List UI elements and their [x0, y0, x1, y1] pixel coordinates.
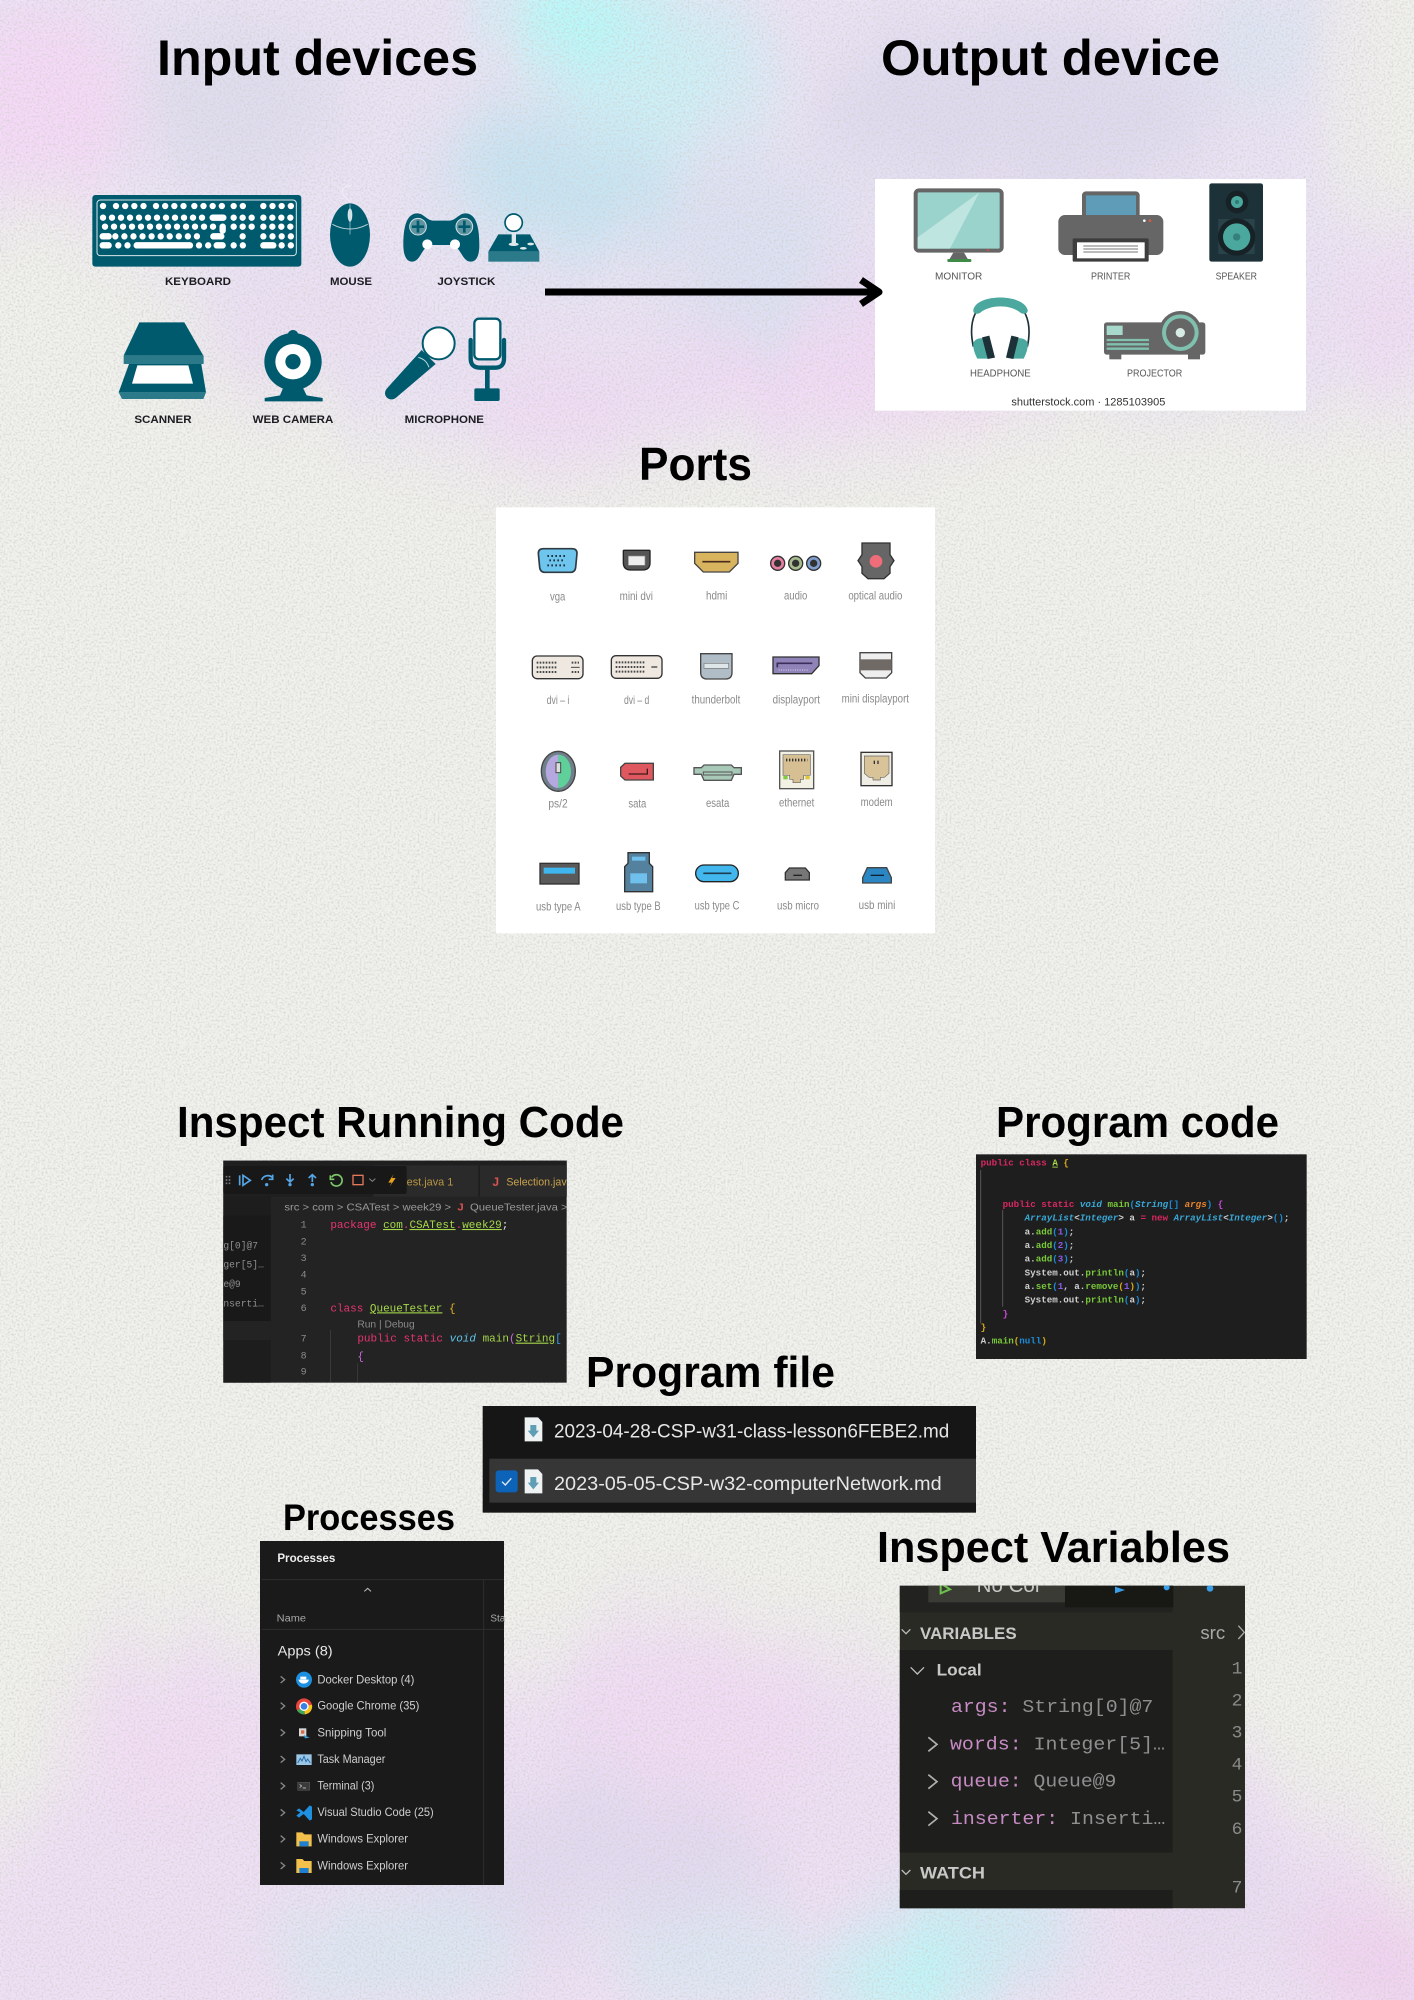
heading text: Processes [277, 1552, 335, 1565]
local scope: Local [937, 1660, 982, 1679]
row chevrons [281, 1676, 285, 1869]
code lines: class QueueTester { [330, 1303, 456, 1315]
line numbers: 1 [1232, 1659, 1242, 1679]
variable fragments: g[0]@7 [223, 1241, 258, 1252]
tab labels [407, 1175, 567, 1189]
label: mouse: MOUSE [330, 276, 372, 288]
breadcrumb: src > com > CSATest > week29 > J QueueTester.java > [284, 1202, 568, 1213]
code listing: a.add(2); [1025, 1240, 1074, 1251]
panel: input device icons [92, 184, 539, 426]
icon: usb type A [540, 863, 579, 884]
panel: output devices [875, 179, 1306, 411]
icon: modem [861, 752, 892, 786]
label: usb type A: usb type A [536, 900, 581, 913]
icon: printer [1058, 191, 1163, 262]
icon: mouse [330, 184, 370, 267]
code listing: a.add(1); [1025, 1226, 1074, 1237]
variables header: VARIABLES [920, 1624, 1017, 1643]
icon: sata [621, 763, 653, 780]
label: usb mini: usb mini [859, 899, 895, 912]
line numbers: 2 [1232, 1691, 1242, 1711]
row: Docker Desktop: Docker Desktop (4) [317, 1673, 414, 1686]
title: Inspect Running Code: Inspect Running Code [177, 1098, 624, 1147]
watch header [901, 1867, 984, 1878]
label: dvi-d: dvi – d [624, 694, 649, 707]
icon: usb micro [785, 868, 809, 880]
row: Task Manager: Task Manager [317, 1753, 385, 1766]
panel: running code screenshot [223, 1161, 568, 1383]
label: web camera: WEB CAMERA [253, 414, 333, 426]
line numbers: 2 [301, 1236, 307, 1247]
label: hdmi: hdmi [706, 589, 727, 602]
code listing: } [981, 1322, 986, 1333]
label: scanner: SCANNER [134, 414, 192, 426]
line numbers: 3 [301, 1253, 307, 1264]
row: Snipping Tool: Snipping Tool [317, 1726, 386, 1739]
label: audio: audio [784, 589, 807, 602]
panel: ports [496, 507, 935, 933]
line numbers: 5 [1232, 1787, 1242, 1807]
debug toolbar [223, 1166, 407, 1194]
label: sata: sata [628, 797, 647, 810]
row: Visual Studio Code: Visual Studio Code (25) [317, 1806, 434, 1819]
code lines [330, 1220, 562, 1363]
panel: processes screenshot: Sta [490, 1613, 506, 1624]
variable rows: args: String[0]@7 [951, 1696, 1153, 1718]
code listing: public static void main(String[] args) { [1003, 1199, 1223, 1210]
line numbers [1232, 1662, 1242, 1892]
label: printer: PRINTER [1091, 271, 1130, 282]
label: stock credit: shutterstock.com · 1285103905 [1011, 397, 1165, 409]
file row 2 [496, 1469, 942, 1495]
icon: speaker [1209, 183, 1263, 262]
title: Input devices: Input devices [157, 30, 478, 86]
code lines: Run | Debug [357, 1320, 415, 1331]
tab labels: est.java 1 [407, 1176, 453, 1188]
icon: headphone [972, 297, 1029, 359]
label: microphone: MICROPHONE [405, 414, 484, 426]
label: dvi-i: dvi – i [547, 694, 569, 707]
icon: usb mini [863, 868, 891, 883]
panel: variables screenshot [900, 1574, 1245, 1908]
tab labels: J [492, 1175, 499, 1189]
icon: mini displayport [860, 653, 892, 678]
label: keyboard: KEYBOARD [165, 276, 231, 288]
label: ps/2: ps/2 [548, 797, 568, 810]
icon: dvi-d [611, 656, 662, 678]
icon: mini dvi [623, 550, 650, 570]
icon: ethernet [780, 751, 814, 789]
label: monitor: MONITOR [935, 271, 982, 282]
code listing: a.set(1, a.remove(1)); [1025, 1281, 1146, 1292]
variable rows: inserter: Inserti… [951, 1808, 1165, 1830]
icon: keyboard [92, 195, 301, 267]
watch header: WATCH [920, 1863, 985, 1882]
icon: gamepad [403, 213, 479, 262]
row: Windows Explorer: Windows Explorer [317, 1833, 408, 1846]
icon: displayport [773, 657, 819, 674]
icon: ps/2 [541, 751, 575, 791]
code lines: package com.CSATest.week29; [330, 1220, 508, 1232]
title: Inspect Variables: Inspect Variables [877, 1523, 1230, 1572]
label: displayport: displayport [773, 693, 821, 706]
label: optical audio: optical audio [848, 589, 902, 602]
row: Terminal: Terminal (3) [317, 1780, 374, 1793]
variable fragments [223, 1241, 264, 1309]
icon: web camera [264, 330, 323, 401]
label: vga: vga [550, 591, 566, 604]
debug bar remnant: No Cor [977, 1574, 1042, 1597]
label: modem: modem [861, 796, 893, 809]
icon: handheld microphone [385, 327, 455, 399]
variable rows [928, 1696, 1165, 1830]
panel: processes screenshot: Name [277, 1613, 306, 1624]
line numbers: 7 [301, 1334, 307, 1345]
icon: thunderbolt [701, 654, 732, 679]
icon: monitor [916, 190, 1002, 262]
code lines: { [357, 1351, 364, 1363]
title: Program code: Program code [996, 1098, 1279, 1147]
row: Google Chrome: Google Chrome (35) [317, 1700, 419, 1713]
icon: projector [1104, 311, 1205, 359]
title: Output device: Output device [881, 30, 1220, 86]
icon: dvi-i [532, 656, 583, 679]
label: mini dvi: mini dvi [620, 590, 653, 603]
icon: vga [538, 549, 577, 572]
variable fragments: nserti… [223, 1298, 264, 1309]
icon: hdmi [695, 552, 738, 572]
variable rows: queue: Queue@9 [951, 1771, 1116, 1793]
debug bar remnant [940, 1586, 1214, 1595]
arrow: input to output [545, 280, 879, 304]
line numbers [301, 1220, 307, 1378]
line numbers: 6 [301, 1303, 307, 1314]
line numbers: 5 [301, 1286, 307, 1297]
line numbers: 3 [1232, 1723, 1242, 1743]
file row 1: 2023-04-28-CSP-w31-class-lesson6FEBE2.md [554, 1422, 949, 1443]
variables header [901, 1628, 1016, 1639]
file row 2: 2023-05-05-CSP-w32-computerNetwork.md [554, 1474, 942, 1495]
code listing: } [1003, 1309, 1008, 1320]
label: joystick: JOYSTICK [437, 276, 495, 288]
row: Docker Desktop [296, 1672, 414, 1688]
title: Processes: Processes [283, 1497, 455, 1538]
variable rows: words: Integer[5]… [950, 1733, 1165, 1755]
label: esata: esata [706, 797, 730, 810]
panel: processes screenshot: Apps (8) [278, 1644, 333, 1659]
local scope [910, 1664, 980, 1676]
icon: studio microphone [471, 319, 504, 401]
code listing: System.out.println(a); [1025, 1295, 1146, 1306]
label: ethernet: ethernet [779, 796, 815, 809]
panel: program file list [483, 1406, 976, 1513]
row: Visual Studio Code [296, 1805, 434, 1821]
icon: arcade joystick [488, 214, 539, 262]
code lines: public static void main(String[ [357, 1334, 562, 1346]
line numbers: 4 [301, 1270, 307, 1281]
icon: scanner [119, 322, 206, 399]
code listing: System.out.println(a); [1025, 1267, 1146, 1278]
label: usb micro: usb micro [777, 899, 819, 912]
line numbers: 9 [301, 1367, 307, 1378]
variable fragments: ger[5]… [223, 1260, 264, 1271]
row: Google Chrome [296, 1698, 419, 1714]
label: usb type B: usb type B [616, 900, 661, 913]
code listing: ArrayList<Integer> a = new ArrayList<Integer>(); [1024, 1213, 1289, 1224]
title: Program file: Program file [586, 1348, 835, 1397]
icon: audio [771, 556, 821, 570]
icon: esata [694, 765, 741, 780]
panel: variables screenshot: src [1200, 1622, 1225, 1643]
label: speaker: SPEAKER [1216, 271, 1257, 282]
icon: usb type B [625, 853, 653, 892]
code listing [981, 1158, 1289, 1347]
line numbers: 7 [1232, 1879, 1242, 1899]
code listing: a.add(3); [1025, 1254, 1074, 1265]
panel: processes screenshot [260, 1541, 506, 1885]
label: usb type C: usb type C [695, 900, 739, 913]
code listing: public class A { [981, 1158, 1069, 1169]
panel: program code screenshot [976, 1154, 1307, 1359]
label: headphone: HEADPHONE [970, 368, 1031, 379]
line numbers: 1 [301, 1220, 307, 1231]
icon: optical audio [858, 543, 894, 579]
title: Ports: Ports [639, 438, 752, 490]
icon: usb type C [696, 865, 738, 882]
line numbers: 8 [301, 1350, 307, 1361]
label: thunderbolt: thunderbolt [692, 693, 741, 706]
row: Windows Explorer: Windows Explorer [317, 1859, 408, 1872]
line numbers: 4 [1232, 1755, 1242, 1775]
code listing: A.main(null) [981, 1336, 1047, 1347]
label: mini displayport: mini displayport [842, 693, 910, 706]
variable fragments: e@9 [223, 1279, 241, 1290]
tab labels: Selection.jav [506, 1176, 567, 1188]
label: projector: PROJECTOR [1127, 368, 1182, 379]
line numbers: 6 [1232, 1820, 1242, 1840]
